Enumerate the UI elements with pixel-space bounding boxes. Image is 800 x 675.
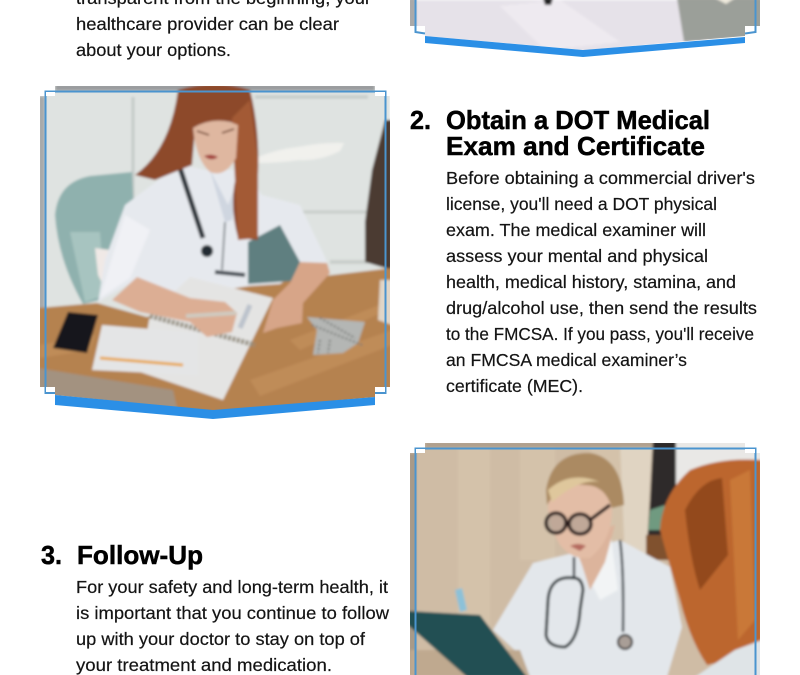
patient red hair: [660, 459, 762, 665]
stethoscope: [574, 540, 623, 632]
band: top photo chevron: [425, 36, 745, 57]
stethoscope: [180, 168, 203, 238]
pill blisters: [307, 317, 365, 355]
phone: [53, 312, 98, 353]
step 2 body text: exam. The medical examiner will: [446, 220, 706, 240]
step 3 heading: 3.: [41, 540, 62, 570]
hair: [135, 84, 258, 240]
step 2 body text: to the FMCSA. If you pass, you'll receive: [446, 324, 754, 344]
glasses: [546, 505, 610, 534]
chair: [55, 172, 135, 304]
step 2 body text: an FMCSA medical examiner’s: [446, 350, 687, 370]
step 3 body text: For your safety and long-term health, it: [76, 577, 388, 597]
corner notches: [46, 92, 385, 392]
step 2 body text: assess your mental and physical: [446, 246, 708, 266]
doctor coat: [493, 540, 682, 675]
step 2 heading: 2.: [410, 105, 431, 135]
text block: step 1 ending: about your options.: [76, 40, 231, 60]
corner notches: [416, 449, 755, 453]
frame: top photo outline: [416, 0, 756, 34]
wall background: [41, 88, 390, 318]
photo: top right clinician coat with frame: [408, 0, 762, 57]
clipboard: [408, 611, 527, 675]
text block: step 1 ending: [76, 0, 371, 60]
band: middle photo chevron: [55, 395, 375, 419]
dark doorway and white wall: [646, 443, 678, 538]
photo: doctor writing at desk with frame: [38, 84, 392, 420]
step 2 body text: license, you'll need a DOT physical: [446, 194, 717, 214]
frame: bottom photo outline: [416, 448, 756, 675]
step 2 heading: Obtain a DOT Medical: [446, 105, 710, 135]
step 3 body text: is important that you continue to follow: [76, 603, 389, 623]
step 3 body text: up with your doctor to stay on top of: [76, 629, 365, 649]
photo: doctor with clipboard and patient: [408, 441, 762, 675]
chair back foreground: [40, 367, 178, 406]
curtain background: [410, 443, 716, 675]
dark cabinet: [365, 120, 392, 270]
step 2 body text: [446, 168, 757, 396]
step 2 body text: drug/alcohol use, then send the results: [446, 298, 757, 318]
text block: step 1 ending: healthcare provider can be clear: [76, 14, 339, 34]
step 3 body text: your treatment and medication.: [76, 655, 332, 675]
notepad and pencil: [90, 323, 149, 374]
blond hair: [546, 453, 624, 508]
face: [193, 121, 238, 173]
step 3 body text: [76, 577, 389, 675]
chair gap between sleeve and body: [248, 225, 300, 284]
step 2 heading: [410, 105, 710, 161]
step 3 heading: Follow-Up: [77, 540, 203, 570]
lab coat: [98, 164, 330, 302]
frame: middle photo outline: [46, 92, 386, 393]
step 2 heading: Exam and Certificate: [446, 131, 705, 161]
arms: [112, 277, 237, 337]
notebook: [140, 277, 273, 400]
pen: [455, 588, 467, 612]
step 2 body text: certificate (MEC).: [446, 376, 583, 396]
table: [38, 268, 392, 420]
step 2 body text: health, medical history, stamina, and: [446, 272, 736, 292]
step 2 body text: Before obtaining a commercial driver's: [446, 168, 755, 188]
neck and face: [578, 526, 614, 590]
